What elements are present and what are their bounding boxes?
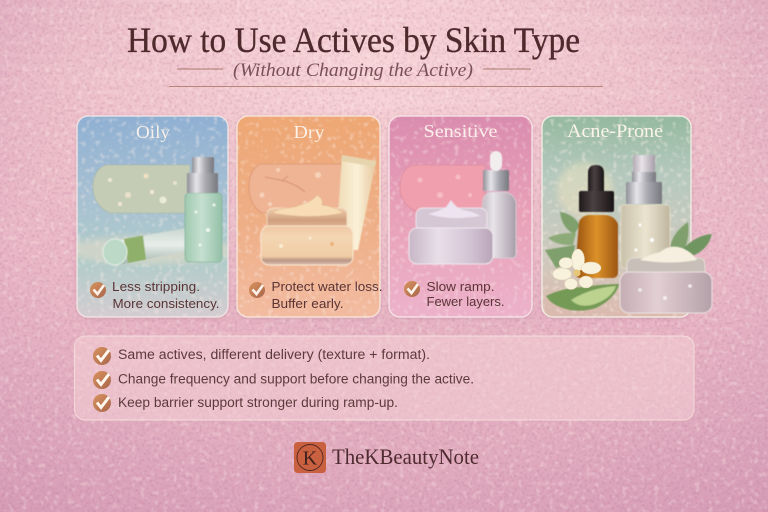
list item: delivery: Same actives, different delivery (texture + format).	[118, 347, 430, 362]
icon: cream jar	[261, 195, 353, 265]
icon: flower	[552, 249, 601, 290]
text: sensitive tips	[426, 279, 504, 309]
icon: amber dropper bottle	[575, 165, 618, 278]
icon: dry skin patch	[249, 164, 342, 213]
card heading: dry: Dry	[294, 122, 324, 142]
icon: aloe	[546, 284, 619, 311]
panel: dry	[237, 116, 382, 317]
icon: check	[404, 281, 420, 297]
panel: sensitive	[389, 116, 532, 317]
logo: TheKBeautyNote	[332, 444, 479, 469]
icon: spray bottle	[621, 155, 670, 268]
subtitle: (Without Changing the Active)	[233, 60, 473, 81]
list item: barrier: Keep barrier support stronger during ramp-up.	[118, 395, 398, 410]
icon: tube	[338, 155, 376, 250]
card heading: sensitive: Sensitive	[424, 121, 498, 141]
text: sensitive tips: Fewer layers.	[426, 294, 504, 309]
icon: check	[249, 282, 265, 298]
logo	[294, 442, 479, 473]
logo: K	[303, 448, 318, 470]
icon: cream jar	[409, 200, 493, 264]
text: oily tips: Less stripping.	[112, 279, 200, 294]
icon: spray bottle	[185, 157, 222, 262]
card heading: acne-prone: Acne-Prone	[567, 121, 663, 142]
icon: dropper bottle	[478, 151, 516, 258]
icon: oily skin patch	[93, 165, 190, 213]
title: How to Use Actives by Skin Type	[127, 20, 580, 60]
text: oily tips	[112, 279, 220, 311]
icon: leaves	[545, 212, 712, 268]
panel: oily	[65, 116, 235, 317]
panel: acne-prone	[542, 116, 712, 317]
icon: sensitive skin patch	[400, 165, 485, 212]
list item: frequency: Change frequency and support before changing the active.	[118, 372, 474, 386]
icon: cream jar	[620, 247, 712, 313]
card heading: oily: Oily	[136, 122, 170, 142]
panel: summary	[74, 336, 694, 420]
icon: lying tube	[103, 228, 186, 265]
icon: check	[90, 282, 106, 298]
text: oily tips: More consistency.	[112, 296, 220, 311]
text: sensitive tips: Slow ramp.	[426, 279, 494, 294]
text: dry tips: Buffer early.	[272, 296, 344, 311]
text: dry tips: Protect water loss.	[272, 279, 382, 294]
text: dry tips	[272, 279, 382, 311]
